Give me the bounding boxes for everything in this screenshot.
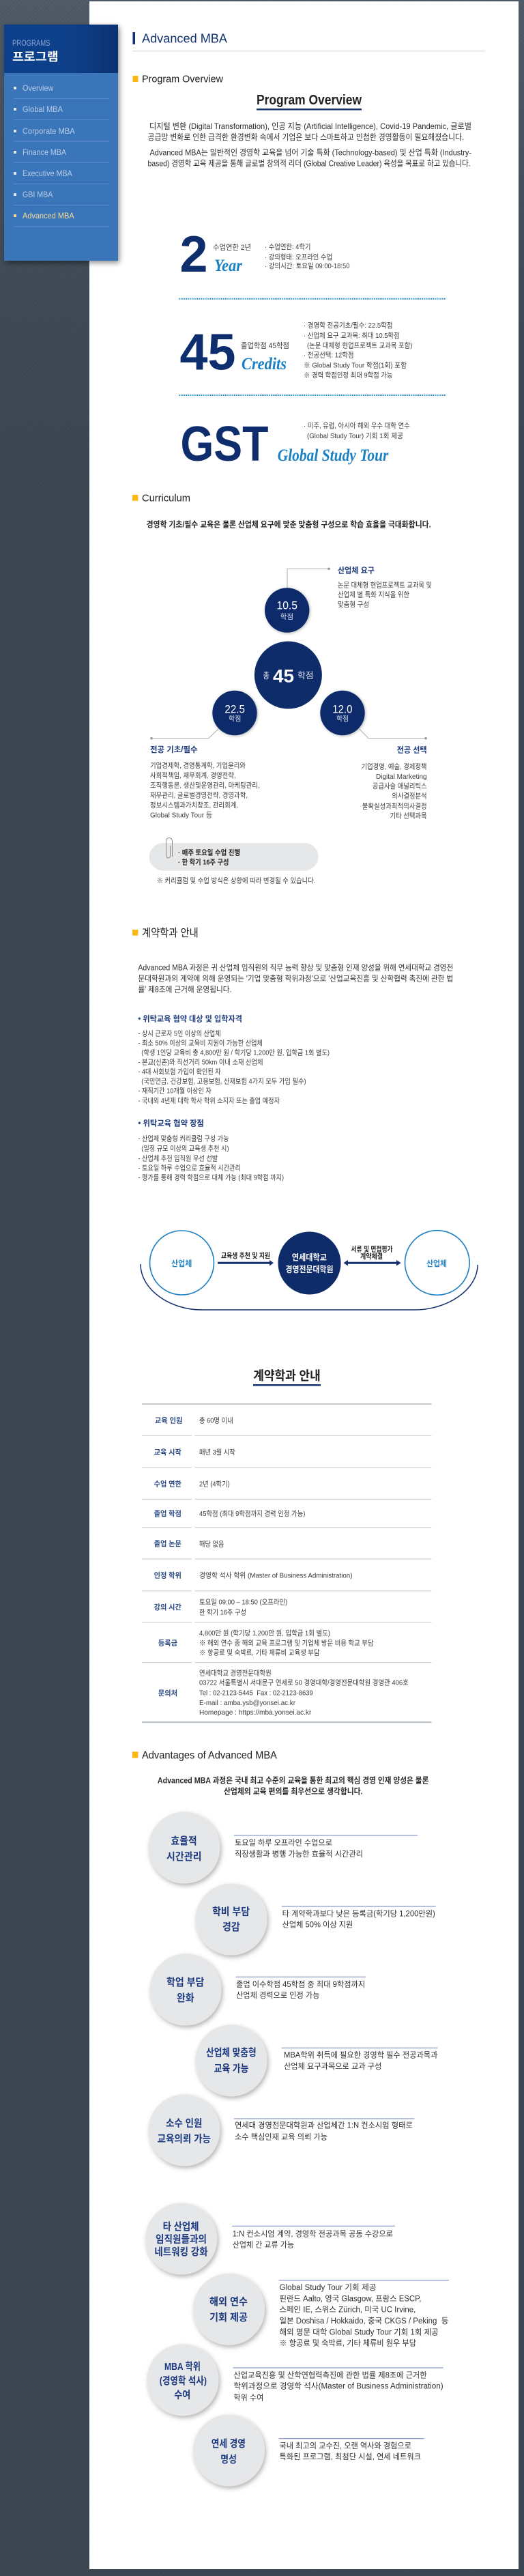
advantage 7: 핀란드 Aalto, 영국 Glasgow, 프랑스 ESCP, (280, 2295, 421, 2304)
advantage 8: 학위 수여 (233, 2393, 263, 2402)
advantage 3: 학업 부담 (166, 1977, 204, 1988)
core courses text: 사회적책임, 재무회계, 경영전략, (150, 771, 236, 780)
advantage 7: 일본 Doshisa / Hokkaido, 중국 CKGS / Peking 등 (280, 2316, 448, 2325)
elective courses text: Digital Marketing (376, 773, 427, 781)
row: thesis: 해당 없음 (199, 1540, 224, 1549)
advantage 1 (149, 1812, 418, 1884)
elective courses text (362, 745, 427, 820)
advantage 7 (193, 2274, 449, 2347)
row: start (154, 1448, 235, 1457)
benefits list: • 위탁교육 협약 장점 (138, 1118, 204, 1128)
arrow: evaluation and contract: 계약체결 (360, 1252, 383, 1261)
eligibility list (138, 1014, 330, 1105)
advantage 6: 네트워킹 강화 (154, 2246, 208, 2258)
advantage 8: (경영학 석사) (160, 2375, 207, 2387)
advantage 6: 타 산업체 (163, 2221, 199, 2233)
page title (132, 31, 485, 52)
curriculum intro: 경영학 기초/필수 교육은 물론 산업체 요구에 맞춘 맞춤형 구성으로 학습 효율을 극대화합니다. (147, 519, 431, 529)
row: enrollment (155, 1416, 233, 1425)
advantage 7: 해외 연수 (209, 2296, 248, 2308)
eligibility list: (국민연금, 건강보험, 고용보험, 산재보험 4가지 모두 가입 필수) (141, 1077, 306, 1086)
core courses text: 기업경제학, 경영통계학, 기업윤리와 (150, 761, 246, 770)
advantage 4: 교육 가능 (214, 2063, 249, 2075)
benefits list: - 산업체 맞춤형 커리큘럼 구성 가능 (138, 1134, 229, 1143)
curriculum note: ※ 커리큘럼 및 수업 방식은 상황에 따라 변경될 수 있습니다. (157, 876, 315, 885)
advantage 7: 스페인 IE, 스위스 Zürich, 미국 UC Irvine, (280, 2306, 416, 2315)
row: duration (154, 1479, 230, 1488)
advantage 5: 소수 인원 (166, 2117, 202, 2130)
circle: 10.5 credits (265, 588, 309, 633)
year details: · 강의시간: 토요일 09:00-18:50 (265, 261, 350, 270)
eligibility list: - 상시 근로자 5인 이상의 산업체 (138, 1029, 221, 1037)
menu items: Advanced MBA (23, 211, 74, 220)
key fact: 2 year: 2 (180, 225, 207, 283)
advantages intro: 산업체의 교육 편의를 최우선으로 생각합니다. (224, 1786, 363, 1796)
circle: 10.5 credits: 10.5 (277, 599, 297, 612)
circle: 12.0 credits: 12.0 (332, 702, 352, 715)
circle: total 45 credits: 45 (273, 666, 294, 686)
table rules (142, 1403, 431, 1723)
advantage 6: 임직원들과의 (156, 2233, 207, 2246)
page title: Advanced MBA (142, 31, 227, 45)
advantage 1: 직장생활과 병행 가능한 효율적 시간관리 (235, 1849, 363, 1859)
industry requirement text: 산업체 별 특화 지식을 위한 (338, 590, 409, 599)
advantage 4: 산업체 요구과목으로 교과 구성 (284, 2062, 381, 2071)
center circle: Yonsei: 연세대학교 (292, 1252, 327, 1263)
row: class time: 강의 시간 (154, 1603, 181, 1612)
row: enrollment: 총 60명 이내 (199, 1416, 233, 1425)
row: start: 교육 시작 (154, 1448, 181, 1457)
eligibility list: • 위탁교육 협약 대상 및 입학자격 (138, 1014, 242, 1024)
elective courses text: 전공 선택 (397, 745, 427, 754)
sidebar navigation (4, 25, 118, 261)
row: tuition: ※ 해외 연수 중 해외 교육 프로그램 및 기업체 방문 비용 학교 부담 (199, 1639, 374, 1648)
core courses text: Global Study Tour 등 (150, 812, 212, 820)
menu items: GBI MBA (23, 190, 53, 199)
bottom arc (141, 1264, 478, 1310)
advantage 2 (195, 1884, 436, 1955)
overview paragraph (147, 121, 471, 168)
left circle: industry (150, 1231, 214, 1295)
contract flow diagram (141, 1231, 478, 1310)
row: degree (154, 1571, 352, 1580)
overview paragraph: 공급망 변화로 인한 급격한 환경변화 속에서 기업은 보다 스마트하고 민첩한 경영활동이 필요해졌습니다. (147, 132, 464, 142)
elective courses text: 의사결정분석 (392, 792, 427, 801)
row: credits (154, 1509, 305, 1518)
row: duration: 수업 연한 (154, 1479, 181, 1488)
menu items: Finance MBA (23, 147, 66, 157)
contract description: 률' 제8조에 근거해 운영됩니다. (138, 986, 232, 994)
industry requirement text: 논문 대체형 현업프로젝트 교과목 및 (338, 581, 432, 590)
arrow: evaluation and contract: 서류 및 면접평가 (351, 1244, 393, 1253)
advantage 9: 연세 경영 (212, 2438, 246, 2450)
key fact: 2 year: Year (214, 257, 242, 275)
key fact: 45 credits: 45 (180, 324, 236, 381)
advantage 2: 경감 (222, 1921, 240, 1933)
benefits list: - 토요일 하루 수업으로 효율적 시간관리 (138, 1163, 241, 1172)
advantage 1: 시간관리 (166, 1851, 202, 1863)
row: contact: 문의처 (158, 1689, 177, 1698)
row: thesis: 졸업 논문 (154, 1539, 181, 1548)
row: contact: Tel : 02-2123-5445 Fax : 02-2123-8639 (199, 1689, 313, 1697)
row: contact: E-mail : amba.ysb@yonsei.ac.kr (199, 1699, 295, 1707)
row: tuition: ※ 항공료 및 숙박료, 기타 체류비 교육생 부담 (199, 1649, 320, 1657)
curriculum credit diagram (150, 565, 432, 820)
advantage 4: MBA학위 취득에 필요한 경영학 필수 전공과목과 (284, 2050, 438, 2059)
advantage 6: 1:N 컨소시엄 계약, 경영학 전공과목 공동 수강으로 (233, 2229, 393, 2238)
menu items: Global MBA (23, 104, 63, 114)
centered title: contract department: 계약학과 안내 (253, 1369, 321, 1383)
industry requirement text: 맞춤형 구성 (338, 601, 369, 609)
advantage 1: 토요일 하루 오프라인 수업으로 (235, 1837, 332, 1847)
elective courses text: 불확실성과최적의사결정 (362, 801, 427, 810)
eligibility list: - 재직기간 10개월 이상인 자 (138, 1087, 212, 1096)
advantage 6 (145, 2203, 395, 2274)
row: credits: 졸업 학점 (154, 1509, 181, 1518)
row: duration: 2년 (4학기) (199, 1480, 230, 1488)
left circle: industry: 산업체 (171, 1259, 192, 1268)
advantage 4: 산업체 맞춤형 (206, 2047, 257, 2059)
advantage 3 (150, 1954, 366, 2026)
circle: total 45 credits: 학점 (297, 671, 314, 681)
eligibility list: - 국내외 4년제 대학 학사 학위 소지자 또는 졸업 예정자 (138, 1096, 280, 1105)
sidebar header: 프로그램 (12, 51, 59, 63)
circle: 12.0 credits (320, 691, 365, 735)
row: tuition (158, 1629, 374, 1657)
circle: total 45 credits (254, 642, 322, 709)
advantage 9: 국내 최고의 교수진, 오랜 역사와 경험으로 (280, 2441, 411, 2450)
section heading: contract department: 계약학과 안내 (142, 927, 199, 939)
credit details: · 경영학 전공기초/필수: 22.5학점 (304, 321, 393, 330)
row: contact: 03722 서울특별시 서대문구 연세로 50 경영대학/경영전문대학원 경영관 406호 (199, 1678, 409, 1687)
advantage 2: 산업체 50% 이상 지원 (282, 1920, 353, 1930)
row: class time: 한 학기 16주 구성 (199, 1608, 246, 1616)
row: tuition: 4,800만 원 (학기당 1,200만 원, 입학금 1회 별도) (199, 1629, 330, 1637)
centered title: program overview: Program Overview (257, 93, 362, 108)
row: enrollment: 교육 인원 (155, 1416, 183, 1425)
advantage 7: 해외 명문 대학 Global Study Tour 기회 1회 제공 (280, 2328, 439, 2336)
year details (265, 242, 350, 270)
arrow: evaluation and contract (344, 1244, 401, 1265)
circle: total 45 credits: 총 (263, 671, 270, 681)
eligibility list: - 4대 사회보험 가입이 확인된 자 (138, 1067, 221, 1076)
credit details (304, 321, 412, 380)
circle: 22.5 credits: 학점 (229, 715, 241, 724)
key fact: GST: GST (180, 417, 269, 472)
advantage 9: 명성 (220, 2454, 237, 2465)
row: degree: 인정 학위 (154, 1571, 181, 1580)
circle: 22.5 credits: 22.5 (224, 702, 245, 715)
advantage 5: 연세대 경영전문대학원과 산업체간 1:N 컨소시엄 형태로 (235, 2121, 413, 2130)
key fact: 45 credits (180, 321, 412, 381)
key fact: 2 year: 수업연한 2년 (213, 243, 251, 252)
contract description: Advanced MBA 과정은 귀 산업체 임직원의 직무 능력 향상 및 맞춤형 인재 양성을 위해 연세대학교 경영전 (138, 962, 453, 972)
schedule pill note: · 한 학기 16주 구성 (178, 858, 229, 867)
schedule pill note: · 매주 토요일 수업 진행 (178, 848, 240, 857)
year details: · 수업연한: 4학기 (265, 242, 311, 251)
advantage 3: 완화 (177, 1992, 194, 2004)
key fact: 2 year (180, 225, 350, 283)
arrow: recommendation (218, 1251, 274, 1265)
core courses text: 전공 기초/필수 (150, 745, 198, 754)
advantage 8: 수여 (174, 2389, 190, 2401)
advantage 7: ※ 항공료 및 숙박료, 기타 체류비 원우 부담 (280, 2338, 416, 2347)
advantage 4 (195, 2024, 438, 2096)
overview paragraph: based) 경영학 교육 제공을 통해 글로벌 창의적 리더 (Global Creative Leader) 육성을 목표로 하고 있습니다. (147, 158, 471, 168)
key fact: 45 credits: 졸업학점 45학점 (241, 341, 289, 350)
advantage 9 (193, 2415, 424, 2486)
credit details: (논문 대체형 현업프로젝트 교과목 포함) (307, 341, 412, 350)
row: class time (154, 1597, 287, 1616)
advantage 2: 학비 부담 (212, 1906, 250, 1918)
advantage 8: MBA 학위 (164, 2361, 201, 2373)
sidebar header: PROGRAMS (12, 38, 50, 48)
year details: · 강의형태: 오프라인 수업 (265, 253, 332, 261)
industry requirement text (338, 565, 432, 609)
credit details: ※ 경력 학점인정 최대 9학점 가능 (304, 371, 393, 380)
circle: 22.5 credits (212, 691, 257, 735)
row: contact: 연세대학교 경영전문대학원 (199, 1669, 272, 1678)
center circle: Yonsei (278, 1231, 341, 1294)
credit details: · 산업체 요구 교과목: 최대 10.5학점 (304, 331, 400, 340)
advantage 6: 산업체 간 교류 가능 (233, 2241, 294, 2250)
row: tuition: 등록금 (158, 1640, 178, 1648)
elective courses text: 공급사슬 애널리틱스 (373, 782, 427, 790)
advantage 7: 기회 제공 (209, 2312, 248, 2323)
advantage 8: 학위과정으로 경영학 석사(Master of Business Administration) (233, 2381, 443, 2391)
menu items: Overview (23, 83, 54, 93)
gst details: (Global Study Tour) 기회 1회 제공 (307, 432, 403, 440)
benefits list: - 평가를 통해 경력 학점으로 대체 가능 (최대 9학점 까지) (138, 1173, 284, 1182)
overview paragraph: Advanced MBA는 일반적인 경영학 교육을 넘어 기술 특화 (Technology-based) 및 산업 특화 (Industry- (150, 147, 471, 157)
advantage 5: 교육의뢰 가능 (157, 2134, 211, 2145)
gst details (304, 421, 410, 440)
row: thesis (154, 1539, 224, 1549)
right circle: industry: 산업체 (426, 1259, 447, 1268)
core courses text: 재무관리, 글로벌경영전략, 경영과학, (150, 790, 248, 799)
icon: paperclip (166, 838, 172, 858)
arrow: recommendation: 교육생 추천 및 지원 (221, 1251, 270, 1260)
overview paragraph: 디지털 변환 (Digital Transformation), 인공 지능 (Artificial Intelligence), Covid-19 Pandemic, 글로벌 (149, 121, 471, 131)
right circle: industry (405, 1231, 469, 1295)
circle: 10.5 credits: 학점 (280, 613, 293, 621)
menu items: Corporate MBA (23, 126, 75, 136)
advantage 8: 산업교육진흥 및 산학연협력촉진에 관한 법률 제8조에 근거한 (233, 2370, 427, 2379)
advantage 2: 타 계약학과보다 낮은 등록금(학기당 1,200만원) (282, 1908, 435, 1918)
advantage 5: 소수 핵심인재 교육 의뢰 가능 (235, 2132, 328, 2141)
advantages intro: Advanced MBA 과정은 국내 최고 수준의 교육을 통한 최고의 핵심 경영 인재 양성은 물론 (158, 1775, 428, 1785)
credit details: · 전공선택: 12학점 (304, 352, 354, 360)
benefits list (138, 1118, 284, 1182)
contract description (138, 962, 453, 994)
advantage 9: 특화된 프로그램, 최첨단 시설, 연세 네트워크 (280, 2452, 421, 2461)
connectors (150, 568, 427, 739)
advantage 8 (147, 2344, 443, 2416)
row: credits: 45학점 (최대 9학점까지 경력 인정 가능) (199, 1509, 305, 1518)
advantage 3: 졸업 이수학점 45학점 중 최대 9학점까지 (236, 1980, 365, 1989)
circle: 12.0 credits: 학점 (336, 715, 349, 724)
benefits list: (일정 규모 이상의 교육생 추천 시) (141, 1144, 229, 1153)
core courses text (150, 745, 260, 820)
credit details: ※ Global Study Tour 학점(1회) 포함 (304, 361, 407, 369)
section heading: program overview: Program Overview (142, 74, 223, 85)
benefits list: - 산업체 추천 임직원 우선 선발 (138, 1154, 218, 1162)
row: start: 매년 3월 시작 (199, 1448, 235, 1457)
key fact: 45 credits: Credits (242, 355, 287, 373)
eligibility list: - 최소 50% 이상의 교육비 지원이 가능한 산업체 (138, 1038, 263, 1047)
contract description: 문대학원과의 계약에 의해 운영되는 '기업 맞춤형 학위과정'으로 '산업교육진흥 및 산학협력 촉진에 관한 법 (138, 973, 453, 983)
core courses text: 조직행동론, 생산및운영관리, 마케팅관리, (150, 782, 260, 790)
elective courses text: 기업경영, 예술, 경제정책 (362, 762, 427, 771)
section heading: curriculum: Curriculum (142, 493, 190, 504)
core courses text: 정보시스템과가치창조, 관리회계, (150, 801, 238, 810)
row: class time: 토요일 09:00 – 18:50 (오프라인) (199, 1597, 287, 1606)
schedule pill note (149, 838, 318, 871)
eligibility list: - 본교(신촌)와 직선거리 50km 이내 소재 산업체 (138, 1057, 263, 1066)
section heading: advantages: Advantages of Advanced MBA (142, 1750, 277, 1761)
gst details: · 미주, 유럽, 아시아 해외 우수 대학 연수 (304, 421, 410, 430)
sidebar header (4, 25, 118, 73)
advantage 7: Global Study Tour 기회 제공 (280, 2283, 377, 2292)
advantage 3: 산업체 경력으로 인정 가능 (236, 1990, 319, 2000)
advantage 5 (149, 2094, 414, 2166)
elective courses text: 기타 선택과목 (390, 812, 427, 820)
industry requirement text: 산업체 요구 (338, 565, 375, 575)
menu items: Executive MBA (23, 169, 72, 178)
row: contact (158, 1669, 409, 1717)
key fact: GST: Global Study Tour (278, 446, 389, 465)
advantage 1: 효율적 (171, 1835, 197, 1847)
row: degree: 경영학 석사 학위 (Master of Business Administration) (199, 1571, 352, 1580)
key fact: GST (180, 417, 410, 472)
row: contact: Homepage : https://mba.yonsei.ac.kr (199, 1708, 312, 1717)
eligibility list: (학생 1인당 교육비 총 4,800만 원 / 학기당 1,200만 원, 입학금 1회 별도) (141, 1048, 330, 1057)
center circle: Yonsei: 경영전문대학원 (285, 1264, 333, 1274)
menu items (14, 83, 109, 227)
contract info table (142, 1403, 431, 1723)
advantages intro (158, 1775, 428, 1796)
